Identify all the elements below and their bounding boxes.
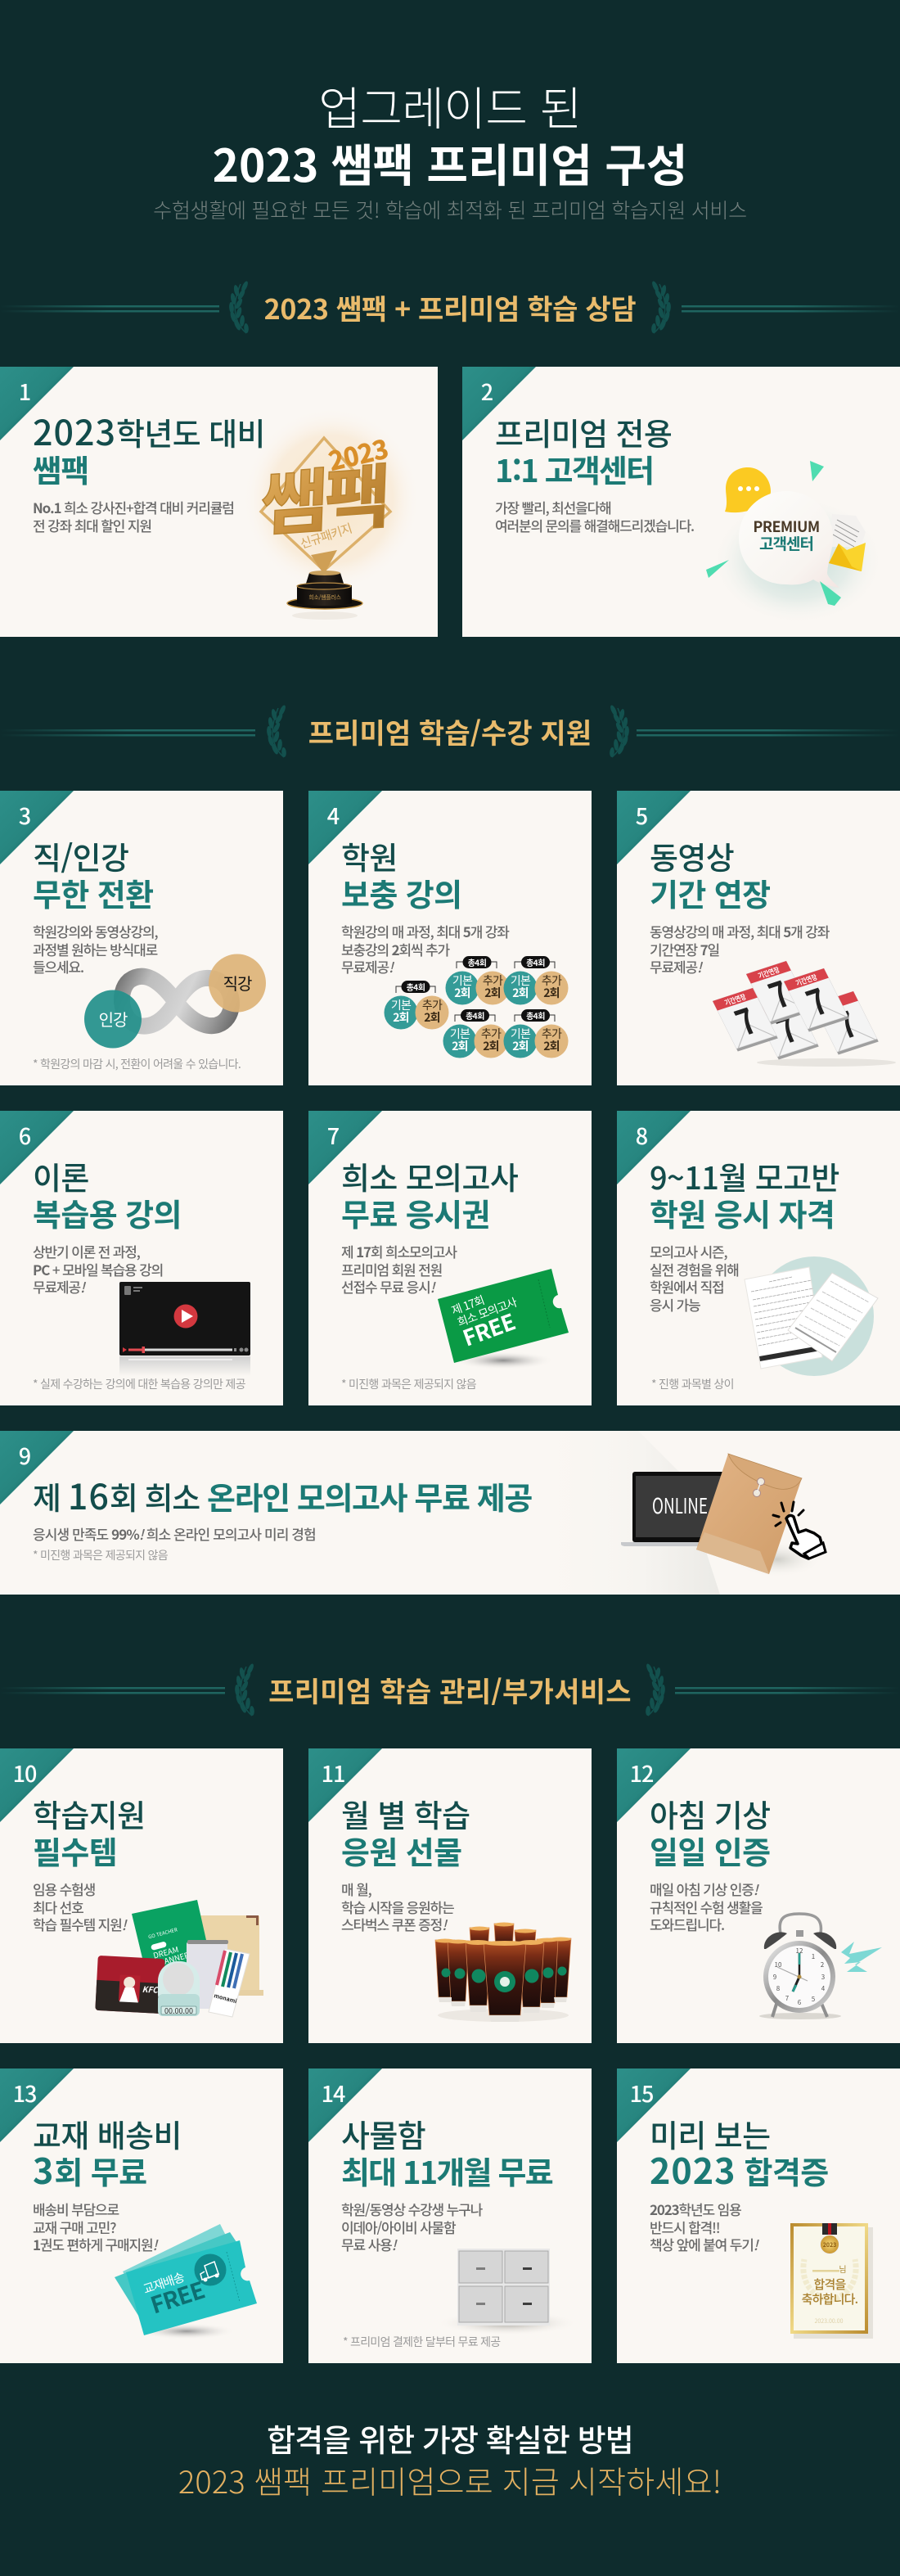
illustration: free delivery tickets: FREE <box>146 2273 209 2321</box>
group: pair left: 2회 <box>424 1009 440 1026</box>
illustration: alarm clock: 10 <box>775 1960 782 1969</box>
illustration: alarm clock: 9 <box>773 1973 776 1982</box>
illustration: gold trophy <box>259 424 404 620</box>
illustration: study goods <box>95 1900 263 2017</box>
section heading: 프리미엄 학습/수강 지원 <box>18 706 881 758</box>
footnote: * 미진행 과목은 제공되지 않음 <box>33 1547 168 1563</box>
illustration: alarm clock: 6 <box>798 1998 802 2007</box>
number badge: 14 <box>322 2077 344 2109</box>
panel: card 12 <box>617 1748 900 2043</box>
illustration: alarm clock: 12 <box>796 1947 803 1956</box>
card description: 학원에서 직접 <box>650 1276 724 1297</box>
footer line 2: 2023 쌤팩 프리미엄으로 지금 시작하세요! <box>178 2457 722 2502</box>
card description: 스타벅스 쿠폰 증정! <box>341 1914 446 1934</box>
card description <box>341 1241 457 1297</box>
group: pair upper right <box>504 956 568 1005</box>
card description: 최다 선호 <box>33 1897 83 1917</box>
card description <box>33 2200 156 2253</box>
group: pair left: 총4회 <box>407 981 425 993</box>
group: pair lower right: 2회 <box>543 1038 560 1054</box>
card description: 모의고사 시즌, <box>650 1241 727 1261</box>
card description: 여러분의 문의를 해결해드리겠습니다. <box>495 515 694 535</box>
group: pair upper middle: 2회 <box>454 985 470 1001</box>
number badge: 12 <box>630 1757 653 1789</box>
card description: 책상 앞에 붙여 두기! <box>650 2234 757 2254</box>
card description: 임용 수험생 <box>33 1879 95 1899</box>
card heading: 월 별 학습 <box>341 1791 470 1836</box>
card heading: 학습지원 <box>33 1791 145 1836</box>
illustration: free delivery tickets <box>106 2220 266 2347</box>
illustration: calendars <box>712 961 896 1067</box>
section heading text: 프리미엄 학습 관리/부가서비스 <box>268 1670 632 1710</box>
illustration: laptop and envelope: ONLINE <box>652 1490 708 1520</box>
illustration: session count circles <box>385 956 568 1058</box>
card description: No.1 희소 강사진+합격 대비 커리큘럼 <box>33 497 234 517</box>
illustration: certificate <box>785 2219 879 2342</box>
card description: PC + 모바일 복습용 강의 <box>33 1259 163 1279</box>
card description <box>33 1879 128 1934</box>
illustration: alarm clock: 3 <box>821 1973 825 1982</box>
card description: 무료제공! <box>33 1276 84 1297</box>
card description: 실전 경험을 위해 <box>650 1259 739 1279</box>
card description: 들으세요. <box>33 956 83 977</box>
card description <box>33 1241 163 1297</box>
card description: 교재 구매 고민? <box>33 2217 115 2237</box>
number badge: 10 <box>13 1757 36 1789</box>
card heading <box>650 833 770 915</box>
number badge <box>617 1748 691 1822</box>
card heading: 미리 보는 <box>650 2111 770 2156</box>
group: pair lower right: 기본 <box>511 1026 531 1042</box>
group: pair upper middle: 2회 <box>484 985 501 1001</box>
group: pair lower right: 추가 <box>542 1026 562 1042</box>
card description: 도와드립니다. <box>650 1914 724 1934</box>
card description: 이데아/아이비 사물함 <box>341 2217 456 2237</box>
group: pair lower right <box>504 1009 568 1058</box>
card description: 학습 시작을 응원하는 <box>341 1897 454 1917</box>
illustration: free mock exam ticket: 제 17회 <box>449 1292 486 1319</box>
card heading: 2023 합격증 <box>650 2144 829 2195</box>
card description <box>341 1879 454 1934</box>
illustration: iced coffee cups <box>435 1922 571 2022</box>
card description: 매일 아침 기상 인증! <box>650 1879 757 1899</box>
number badge <box>0 1748 74 1822</box>
panel: card 1 <box>0 367 438 637</box>
number badge: 5 <box>636 799 647 831</box>
number badge: 1 <box>19 375 30 407</box>
card description <box>650 2200 757 2253</box>
group: pair lower middle: 2회 <box>483 1038 499 1054</box>
number badge <box>308 1111 382 1184</box>
illustration: laptop and envelope <box>621 1453 827 1574</box>
card description <box>341 921 509 977</box>
card description <box>650 921 830 977</box>
card description: 응시 가능 <box>650 1294 700 1315</box>
footnote: * 진행 과목별 상이 <box>651 1376 734 1392</box>
illustration: calendars: 기간연장 <box>756 964 782 981</box>
card description <box>650 1241 739 1315</box>
card description: 동영상강의 매 과정, 최대 5개 강좌 <box>650 921 829 941</box>
panel: card 5 <box>617 791 900 1085</box>
card description: 학원강의 매 과정, 최대 5개 강좌 <box>341 921 509 941</box>
number badge <box>0 1111 74 1184</box>
illustration: calendars: 7 <box>826 998 866 1049</box>
panel: card 2 <box>462 367 900 637</box>
group: pair lower middle: 총4회 <box>466 1009 484 1022</box>
card description: 가장 빨리, 최선을다해 <box>495 497 611 517</box>
card heading: 제 16회 희소 온라인 모의고사 무료 제공 <box>33 1469 532 1520</box>
number badge <box>0 1431 74 1505</box>
group: pair upper right: 추가 <box>542 972 562 989</box>
card description <box>33 921 158 977</box>
illustration: calendars: 7 <box>797 975 836 1026</box>
card heading: 필수템 <box>33 1828 117 1873</box>
illustration: study goods: 00.00.00 <box>164 2005 193 2016</box>
number badge <box>0 367 74 440</box>
number badge <box>617 2068 691 2142</box>
number badge <box>308 1748 382 1822</box>
card heading: 쌤팩 <box>33 446 89 491</box>
illustration: exam papers <box>745 1256 879 1376</box>
illustration: gold trophy: 쌤팩 <box>259 440 390 550</box>
title line 1: 업그레이드 된 <box>318 73 582 139</box>
illustration: calendars: 7 <box>759 968 799 1019</box>
panel: card 4 <box>308 791 592 1085</box>
panel: card 10 <box>0 1748 283 2043</box>
card description <box>33 497 234 535</box>
card heading: 최대 11개월 무료 <box>341 2148 552 2193</box>
illustration: study goods: GO TEACHER <box>147 1925 178 1940</box>
number badge <box>462 367 536 440</box>
number badge: 3 <box>19 799 30 831</box>
group: pair upper middle: 총4회 <box>468 956 487 968</box>
card description: 배송비 부담으로 <box>33 2199 119 2219</box>
card heading: 1:1 고객센터 <box>495 446 653 491</box>
card heading <box>650 1153 839 1235</box>
card description: 상반기 이론 전 과정, <box>33 1241 140 1261</box>
card description: 응시생 만족도 99%! 희소 온라인 모의고사 미리 경험 <box>33 1523 316 1544</box>
group: pair lower middle: 기본 <box>450 1026 470 1042</box>
panel: card 9 banner <box>0 1431 900 1595</box>
card heading: 보충 강의 <box>341 870 461 915</box>
card description: 규칙적인 수험 생활을 <box>650 1897 763 1917</box>
card description: 보충강의 2회씩 추가 <box>341 939 449 959</box>
footer line 1: 합격을 위한 가장 확실한 방법 <box>267 2416 633 2461</box>
number badge <box>617 791 691 864</box>
card description: 제 17회 희소모의고사 <box>341 1241 457 1261</box>
group: pair upper right: 2회 <box>543 985 560 1001</box>
illustration: premium speech bubble: 고객센터 <box>759 532 813 554</box>
illustration: infinity loop <box>84 954 266 1048</box>
illustration: gold trophy: 희소/쌤플러스 <box>308 593 342 602</box>
card heading <box>341 1791 470 1873</box>
card description: 무료 사용! <box>341 2234 395 2254</box>
card heading: 이론 <box>33 1153 89 1198</box>
illustration: infinity loop: 직강 <box>223 971 252 995</box>
card description <box>650 1879 763 1934</box>
number badge <box>0 791 74 864</box>
card description: 2023학년도 임용 <box>650 2199 741 2219</box>
number badge: 9 <box>19 1439 30 1471</box>
illustration: alarm clock: 8 <box>776 1984 781 1993</box>
illustration: study goods: monami <box>213 1992 237 2005</box>
group: pair upper right: 총4회 <box>526 956 545 968</box>
card description: 무료제공! <box>341 956 393 977</box>
illustration: free mock exam ticket: FREE <box>458 1305 519 1353</box>
section heading: 쌤팩 + 프리미엄 학습 상담 <box>16 282 884 334</box>
number badge: 7 <box>327 1119 339 1151</box>
illustration: alarm clock: 4 <box>821 1984 826 1993</box>
card description: 무료제공! <box>650 956 701 977</box>
panel: card 8 <box>617 1111 900 1405</box>
card heading <box>341 1153 518 1235</box>
panel: card 7 <box>308 1111 592 1405</box>
card heading: 학원 응시 자격 <box>650 1190 835 1235</box>
card description: 학습 필수템 지원! <box>33 1914 125 1934</box>
card description: 반드시 합격!! <box>650 2217 719 2237</box>
illustration: free mock exam ticket <box>438 1269 569 1367</box>
section heading: 프리미엄 학습 관리/부가서비스 <box>16 1663 884 1716</box>
group: pair upper right: 2회 <box>512 985 529 1001</box>
group: pair upper middle <box>445 956 509 1005</box>
number badge <box>308 2068 382 2142</box>
card description: 과정별 원하는 방식대로 <box>33 939 157 959</box>
panel: card 14 <box>308 2068 592 2363</box>
footnote: * 프리미엄 결제한 달부터 무료 제공 <box>343 2334 500 2350</box>
number badge: 11 <box>322 1757 344 1789</box>
card heading <box>33 1791 145 1873</box>
illustration: free mock exam ticket: 희소 모의고사 <box>455 1293 520 1330</box>
illustration: calendars: 7 <box>767 1003 806 1054</box>
panel: card 3 <box>0 791 283 1085</box>
group: pair left <box>385 981 448 1030</box>
panel: card 13 <box>0 2068 283 2363</box>
card heading <box>33 2115 182 2189</box>
card description: 매 월, <box>341 1879 371 1899</box>
card heading: 학원 <box>341 833 398 878</box>
card heading: 동영상 <box>650 833 734 878</box>
card heading <box>650 1791 770 1873</box>
number badge: 4 <box>327 799 339 831</box>
illustration: calendars: 기간연장 <box>722 991 749 1008</box>
card heading: 사물함 <box>341 2111 425 2156</box>
illustration: calendars: 기간연장 <box>794 972 820 988</box>
group: pair lower right: 2회 <box>512 1038 529 1054</box>
illustration: video player <box>119 1282 250 1372</box>
footnote: * 실제 수강하는 강의에 대한 복습용 강의만 제공 <box>33 1376 245 1392</box>
illustration: infinity loop: 인강 <box>99 1007 128 1031</box>
card heading: 9~11월 모고반 <box>650 1153 839 1198</box>
title line 2: 2023 쌤팩 프리미엄 구성 <box>213 129 687 195</box>
card description: 프리미엄 회원 전원 <box>341 1259 442 1279</box>
illustration: certificate: 2023 <box>823 2241 836 2249</box>
group: pair left: 기본 <box>391 997 412 1013</box>
number badge: 15 <box>630 2077 653 2109</box>
card description <box>495 497 694 535</box>
card heading: 교재 배송비 <box>33 2111 182 2156</box>
card heading: 2023학년도 대비 <box>33 405 265 456</box>
card heading: 복습용 강의 <box>33 1190 182 1235</box>
background shadow wedge <box>671 1464 720 1595</box>
illustration: certificate: 님 <box>839 2262 847 2275</box>
group: pair upper middle: 추가 <box>483 972 503 989</box>
card description: 1권도 편하게 구매지원! <box>33 2234 156 2254</box>
card heading: 3회 무료 <box>33 2144 147 2195</box>
number badge: 2 <box>481 375 493 407</box>
number badge: 8 <box>636 1119 647 1151</box>
illustration: study goods: DREAM <box>151 1943 180 1961</box>
group: pair lower middle <box>443 1009 507 1058</box>
card description: 전 강좌 최대 할인 지원 <box>33 515 151 535</box>
card heading <box>33 1153 182 1235</box>
footer closing message <box>0 2415 900 2505</box>
card heading: 아침 기상 <box>650 1791 770 1836</box>
card heading <box>495 409 672 491</box>
card heading <box>33 405 265 491</box>
illustration: gold trophy: 신규패키지 <box>298 520 353 553</box>
card heading <box>341 2115 552 2189</box>
section heading text: 2023 쌤팩 + 프리미엄 학습 상담 <box>264 287 636 327</box>
number badge <box>308 791 382 864</box>
footnote: * 미진행 과목은 제공되지 않음 <box>341 1376 476 1392</box>
card heading: 일일 인증 <box>650 1828 770 1873</box>
illustration: alarm clock <box>756 1908 891 2023</box>
illustration: alarm clock: 7 <box>785 1994 790 2003</box>
card description: 학원/동영상 수강생 누구나 <box>341 2199 482 2219</box>
card heading: 희소 모의고사 <box>341 1153 518 1198</box>
card description: 학원강의와 동영상강의, <box>33 921 157 941</box>
panel: card 11 <box>308 1748 592 2043</box>
title: header <box>153 73 747 224</box>
illustration: premium speech bubble <box>706 461 866 609</box>
illustration: gold trophy: 2023 <box>325 428 391 478</box>
card description <box>341 2200 482 2253</box>
illustration: lockers <box>435 2244 578 2343</box>
illustration: alarm clock: 5 <box>812 1995 815 2004</box>
card heading: 기간 연장 <box>650 870 770 915</box>
subtitle: 수험생활에 필요한 모든 것! 학습에 최적화 된 프리미엄 학습지원 서비스 <box>153 195 747 224</box>
number badge <box>0 2068 74 2142</box>
illustration: alarm clock: 1 <box>812 1952 815 1961</box>
card heading <box>341 833 461 915</box>
group: pair upper middle: 기본 <box>452 972 473 989</box>
group: pair lower right: 총4회 <box>526 1009 545 1022</box>
card heading: 프리미엄 전용 <box>495 409 672 454</box>
illustration: study goods: PLANNER <box>154 1949 191 1969</box>
illustration: certificate: 2023.00.00 <box>815 2317 844 2326</box>
section heading text: 프리미엄 학습/수강 지원 <box>308 711 592 751</box>
number badge: 13 <box>13 2077 36 2109</box>
illustration: certificate: 합격을 <box>813 2276 846 2293</box>
card heading: 무한 전환 <box>33 870 153 915</box>
group: pair left: 추가 <box>422 997 443 1013</box>
panel: card 6 <box>0 1111 283 1405</box>
illustration: certificate: 축하합니다. <box>802 2290 858 2308</box>
card heading: 직/인강 <box>33 833 128 878</box>
number badge <box>617 1111 691 1184</box>
group: pair upper right: 기본 <box>511 972 531 989</box>
illustration: calendars: 7 <box>726 995 765 1046</box>
card description: 기간연장 7일 <box>650 939 719 959</box>
card heading <box>650 2115 829 2189</box>
card description: 선접수 무료 응시! <box>341 1276 434 1297</box>
group: pair left: 2회 <box>393 1009 409 1026</box>
group: pair lower middle: 추가 <box>481 1026 502 1042</box>
illustration: premium speech bubble: PREMIUM <box>753 516 820 537</box>
footnote: * 학원강의 마감 시, 전환이 어려울 수 있습니다. <box>33 1056 241 1072</box>
number badge: 6 <box>19 1119 30 1151</box>
illustration: alarm clock: 2 <box>821 1960 825 1969</box>
illustration: study goods: KFC <box>142 1983 160 1996</box>
panel: card 15 <box>617 2068 900 2363</box>
card heading: 응원 선물 <box>341 1828 461 1873</box>
card heading: 무료 응시권 <box>341 1190 490 1235</box>
card heading <box>33 833 153 915</box>
illustration: free delivery tickets: 교재배송 <box>141 2268 187 2298</box>
group: pair lower middle: 2회 <box>452 1038 468 1054</box>
